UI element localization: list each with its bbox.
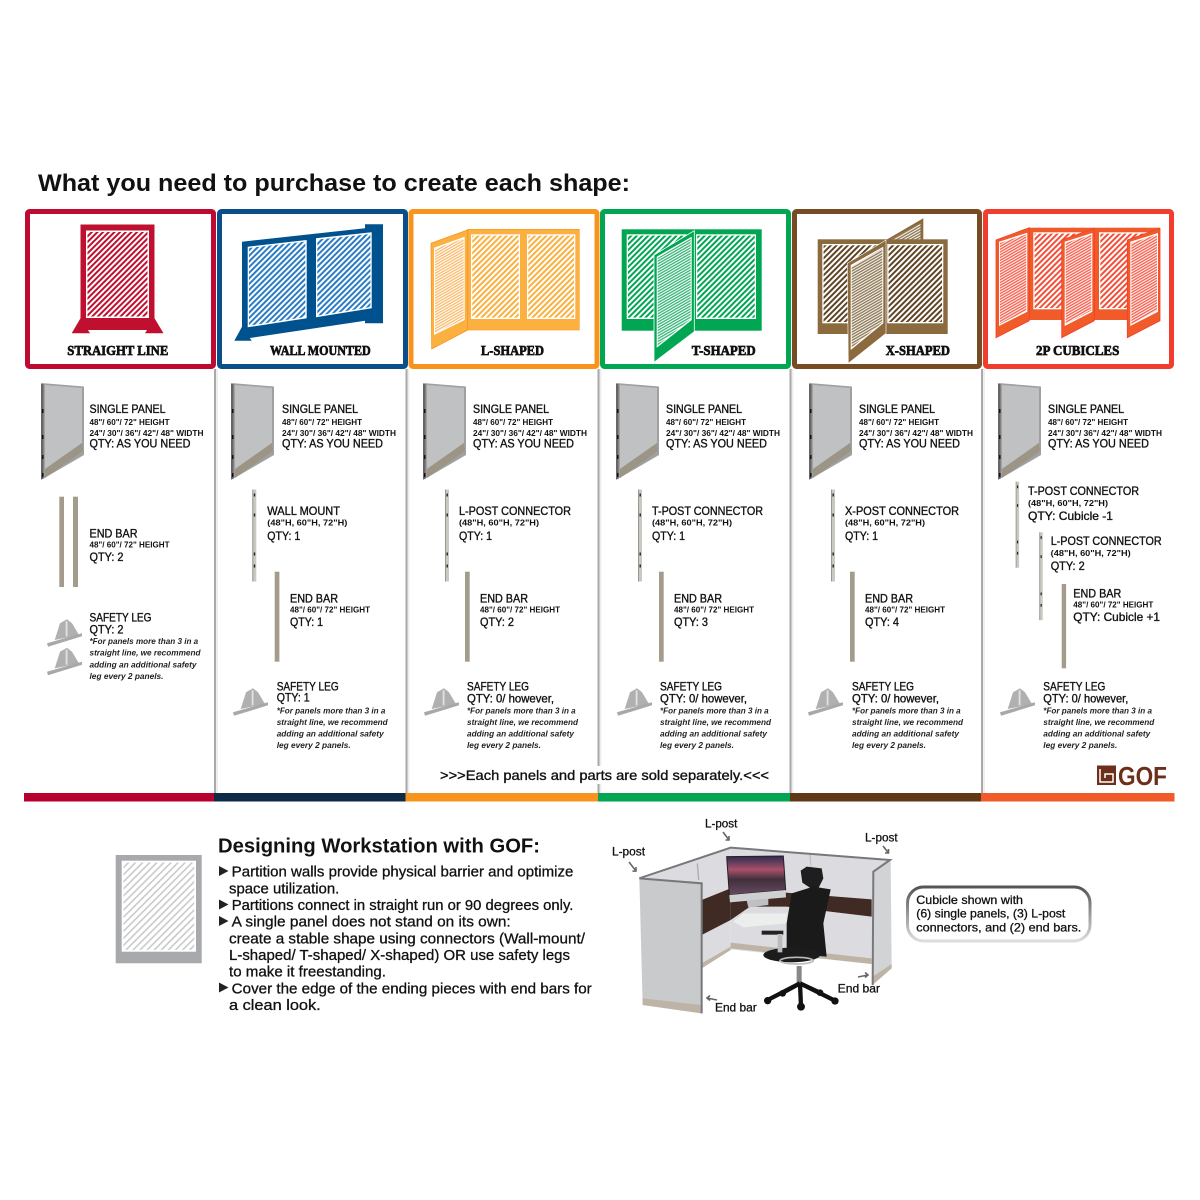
- text: single panel: QTY: AS YOU NEED: [859, 436, 960, 450]
- text: L-post connector: (48"H, 60"H, 72"H): [459, 519, 539, 528]
- icon: X-shaped partition: [818, 218, 948, 363]
- text: single panel: 24"/ 30"/ 36"/ 42"/ 48" WIDTH: [1048, 429, 1162, 438]
- title: What you need to purchase to create each shape:: [38, 170, 630, 197]
- text: single panel: 48"/ 60"/ 72" HEIGHT: [666, 418, 746, 427]
- text: single panel: QTY: AS YOU NEED: [473, 436, 574, 450]
- text: safety leg: SAFETY LEG: [90, 611, 152, 625]
- text: end bar: [290, 591, 370, 629]
- icon: safety leg: [1000, 688, 1035, 716]
- text: safety leg: adding an additional safety: [467, 729, 575, 739]
- labels: cubicle parts: End bar: [715, 1001, 757, 1015]
- callout: cubicle contents: [908, 887, 1090, 941]
- icon: single panel: [809, 383, 852, 480]
- icon: single panel: [616, 383, 659, 480]
- text: safety leg: [277, 680, 388, 750]
- text block: design guidance: L-shaped/ T-shaped/ X-shaped) OR use safety legs: [229, 947, 570, 964]
- text: safety leg: leg every 2 panels.: [467, 740, 541, 750]
- logo: GOF: [1097, 761, 1167, 791]
- text: T-post connector: [652, 504, 763, 543]
- text: safety leg: QTY: 0/ however,: [852, 691, 939, 705]
- text block: design guidance: a clean look.: [229, 997, 321, 1014]
- icon: safety leg: [424, 688, 459, 716]
- column 2 parts: [231, 383, 396, 750]
- text: end bar: 48"/ 60"/ 72" HEIGHT: [90, 540, 170, 549]
- text: end bar: [674, 591, 754, 629]
- text block: design guidance: [219, 864, 592, 1014]
- icon: T-post connector: [1016, 482, 1019, 568]
- text: single panel: [90, 402, 204, 450]
- text: end bar: END BAR: [865, 591, 913, 605]
- label: X-shaped: X-SHAPED: [886, 344, 950, 359]
- text block: design guidance: space utilization.: [229, 880, 339, 897]
- text: end bar: QTY: Cubicle +1: [1073, 610, 1160, 624]
- panel: L-shaped: [411, 212, 597, 366]
- column 3 parts: [423, 383, 587, 750]
- column dividers: [214, 369, 985, 793]
- heading: designing workstation: Designing Workstation with GOF:: [218, 835, 540, 857]
- logo: GOF: GOF: [1118, 761, 1167, 791]
- note: sold separately: >>>Each panels and parts are sold separately.<<<: [440, 767, 769, 783]
- text: single panel: 24"/ 30"/ 36"/ 42"/ 48" WIDTH: [473, 429, 587, 438]
- office chair: [762, 867, 839, 1011]
- monitor: [727, 856, 786, 907]
- text: safety leg: adding an additional safety: [90, 659, 198, 669]
- text: L-post connector: [1051, 534, 1162, 573]
- text: safety leg: adding an additional safety: [277, 729, 385, 739]
- icon: T-post connector: [638, 490, 642, 582]
- text: single panel: SINGLE PANEL: [666, 402, 742, 416]
- text block: design guidance: Partitions connect in straight run or 90 degrees only.: [232, 897, 573, 914]
- icon: single panel: [231, 383, 274, 480]
- text: safety leg: SAFETY LEG: [852, 680, 914, 694]
- text: safety leg: leg every 2 panels.: [660, 740, 734, 750]
- text: L-post connector: (48"H, 60"H, 72"H): [1051, 549, 1131, 558]
- icon: safety leg: [617, 688, 652, 716]
- text: safety leg: *For panels more than 3 in a: [90, 636, 198, 646]
- text: single panel: SINGLE PANEL: [1048, 402, 1124, 416]
- text: wall mount: (48"H, 60"H, 72"H): [267, 519, 348, 528]
- text: single panel: 24"/ 30"/ 36"/ 42"/ 48" WIDTH: [90, 429, 204, 438]
- text: safety leg: leg every 2 panels.: [1043, 740, 1117, 750]
- text: safety leg: SAFETY LEG: [660, 680, 722, 694]
- text: safety leg: straight line, we recommend: [467, 717, 579, 727]
- arrows: cubicle parts: [629, 832, 888, 1000]
- text: T-post connector: QTY: 1: [652, 529, 685, 543]
- text: safety leg: adding an additional safety: [852, 729, 960, 739]
- icon: L-post connector: [445, 490, 449, 582]
- text block: design guidance: to make it freestanding.: [229, 964, 386, 981]
- text: safety leg: QTY: 1: [277, 691, 310, 705]
- text: single panel: SINGLE PANEL: [90, 402, 166, 416]
- icon: end bar: [659, 572, 664, 662]
- text: L-post connector: L-POST CONNECTOR: [1051, 534, 1162, 548]
- text: end bar: QTY: 2: [480, 615, 514, 629]
- text: single panel: 48"/ 60"/ 72" HEIGHT: [859, 418, 939, 427]
- text: safety leg: *For panels more than 3 in a: [467, 705, 576, 715]
- icon: 2P cubicles partition: [996, 228, 1160, 338]
- text: single panel: [473, 402, 587, 450]
- text: end bar: [90, 527, 170, 564]
- text: end bar: [480, 591, 560, 629]
- text: safety leg: *For panels more than 3 in a: [1043, 705, 1152, 715]
- icon: end bars: [59, 497, 78, 587]
- text: end bar: END BAR: [674, 591, 722, 605]
- text: safety leg: straight line, we recommend: [90, 648, 201, 658]
- column 6 parts: [998, 383, 1162, 750]
- text: single panel: SINGLE PANEL: [473, 402, 549, 416]
- text: safety leg: straight line, we recommend: [1043, 717, 1155, 727]
- column 4 parts: [616, 383, 780, 750]
- text: single panel: QTY: AS YOU NEED: [90, 436, 191, 450]
- panel: 2P cubicles: [986, 212, 1172, 366]
- icon: L-post connector: [1039, 532, 1043, 620]
- icon: end bar: [275, 572, 279, 662]
- text: safety leg: straight line, we recommend: [660, 717, 772, 727]
- label: straight line: STRAIGHT LINE: [67, 344, 168, 359]
- text: end bar: QTY: 1: [290, 615, 323, 629]
- text: safety leg: [467, 680, 579, 750]
- text: T-post connector: (48"H, 60"H, 72"H): [652, 519, 732, 528]
- icon: end bar: [850, 572, 855, 662]
- illustration: cubicle with chair: [639, 848, 892, 1013]
- text: end bar: END BAR: [290, 591, 338, 605]
- callout: cubicle contents: (6) single panels, (3) L-post: [916, 906, 1066, 920]
- text: safety leg: [852, 680, 964, 750]
- text: end bar: END BAR: [1073, 587, 1122, 601]
- text: end bar: [865, 591, 945, 629]
- icon: X-post connector: [831, 490, 835, 582]
- text: X-post connector: [845, 504, 959, 543]
- text: single panel: 48"/ 60"/ 72" HEIGHT: [1048, 418, 1128, 427]
- text: X-post connector: (48"H, 60"H, 72"H): [845, 519, 925, 528]
- text: safety leg: leg every 2 panels.: [852, 740, 926, 750]
- column 1 parts: [41, 383, 204, 681]
- text: L-post connector: L-POST CONNECTOR: [459, 504, 571, 518]
- text: L-post connector: QTY: 1: [459, 529, 492, 543]
- text: safety leg: *For panels more than 3 in a: [277, 705, 386, 715]
- text: single panel: 24"/ 30"/ 36"/ 42"/ 48" WIDTH: [282, 429, 396, 438]
- labels: cubicle parts: L-post: [865, 831, 898, 845]
- text: single panel: SINGLE PANEL: [282, 402, 358, 416]
- text: X-post connector: QTY: 1: [845, 529, 878, 543]
- text: end bar: 48"/ 60"/ 72" HEIGHT: [480, 605, 560, 614]
- icon: single panel: [41, 383, 84, 480]
- labels: cubicle parts: L-post: [705, 816, 738, 830]
- text: T-post connector: [1028, 484, 1139, 523]
- text: wall mount: [267, 504, 348, 543]
- text: single panel: [666, 402, 780, 450]
- text: safety leg: [1043, 680, 1155, 750]
- text: safety leg: adding an additional safety: [1043, 729, 1152, 739]
- labels: cubicle parts: L-post: [612, 845, 646, 859]
- text block: design guidance: create a stable shape using connectors (Wall-mount/: [229, 930, 586, 947]
- text: end bar: 48"/ 60"/ 72" HEIGHT: [290, 605, 370, 614]
- text: single panel: 48"/ 60"/ 72" HEIGHT: [282, 418, 362, 427]
- text: safety leg: [660, 680, 772, 750]
- text: safety leg: straight line, we recommend: [277, 717, 388, 727]
- icon: safety leg: [808, 688, 843, 716]
- label: T-shaped: T-SHAPED: [692, 344, 756, 359]
- label: 2P cubicles: 2P CUBICLES: [1036, 344, 1119, 359]
- icon: wall mount post: [252, 490, 256, 582]
- column 5 parts: [808, 383, 973, 750]
- text: safety leg: QTY: 0/ however,: [1043, 691, 1128, 705]
- text: X-post connector: X-POST CONNECTOR: [845, 504, 959, 518]
- icon: grey partition sample: [116, 855, 202, 963]
- text: T-post connector: T-POST CONNECTOR: [652, 504, 763, 518]
- text: L-post connector: [459, 504, 571, 543]
- text: end bar: QTY: 3: [674, 615, 708, 629]
- callout: cubicle contents: connectors, and (2) end bars.: [916, 921, 1081, 935]
- text: single panel: 48"/ 60"/ 72" HEIGHT: [90, 418, 170, 427]
- text: end bar: END BAR: [90, 527, 138, 541]
- panel: straight line shape: [28, 212, 214, 366]
- text: T-post connector: T-POST CONNECTOR: [1028, 484, 1139, 498]
- text: safety leg: adding an additional safety: [660, 729, 768, 739]
- panel: wall mounted shape: [220, 212, 406, 366]
- icon: single panel: [423, 383, 466, 480]
- text: T-post connector: (48"H, 60"H, 72"H): [1028, 499, 1108, 508]
- icon: L-shaped partition: [431, 229, 579, 349]
- text: safety leg: SAFETY LEG: [467, 680, 529, 694]
- text: single panel: [859, 402, 973, 450]
- keyboard tray: [733, 913, 787, 927]
- text: safety leg: leg every 2 panels.: [90, 671, 164, 681]
- callout: cubicle contents: Cubicle shown with: [916, 893, 1023, 907]
- text: safety leg: [90, 611, 201, 681]
- labels: cubicle parts: [612, 816, 898, 1015]
- text: wall mount: WALL MOUNT: [267, 504, 341, 518]
- text: single panel: 24"/ 30"/ 36"/ 42"/ 48" WIDTH: [666, 429, 780, 438]
- text: single panel: 24"/ 30"/ 36"/ 42"/ 48" WIDTH: [859, 429, 973, 438]
- labels: cubicle parts: End bar: [838, 982, 880, 996]
- icon: single panel: [998, 383, 1041, 480]
- icon: end bar: [465, 572, 470, 662]
- text: end bar: 48"/ 60"/ 72" HEIGHT: [1073, 600, 1153, 609]
- text: safety leg: *For panels more than 3 in a: [852, 705, 961, 715]
- label: wall mounted: WALL MOUNTED: [270, 344, 371, 359]
- text: end bar: END BAR: [480, 591, 528, 605]
- text: end bar: 48"/ 60"/ 72" HEIGHT: [865, 605, 945, 614]
- text: T-post connector: QTY: Cubicle -1: [1028, 509, 1113, 523]
- text block: design guidance: A single panel does not stand on its own:: [232, 914, 511, 931]
- text: single panel: QTY: AS YOU NEED: [666, 436, 767, 450]
- text: safety leg: straight line, we recommend: [852, 717, 964, 727]
- text: safety leg: leg every 2 panels.: [277, 740, 351, 750]
- text block: design guidance: Cover the edge of the ending pieces with end bars for: [232, 980, 592, 997]
- text: safety leg: SAFETY LEG: [277, 680, 339, 694]
- text: end bar: QTY: 4: [865, 615, 899, 629]
- text: single panel: [282, 402, 396, 450]
- icon: straight line partition: [72, 224, 164, 333]
- icon: safety leg: [233, 688, 268, 716]
- text: end bar: 48"/ 60"/ 72" HEIGHT: [674, 605, 754, 614]
- text: end bar: QTY: 2: [90, 550, 124, 564]
- text: single panel: 48"/ 60"/ 72" HEIGHT: [473, 418, 553, 427]
- text: single panel: QTY: AS YOU NEED: [1048, 436, 1149, 450]
- icon: end bar: [1062, 584, 1066, 668]
- text: safety leg: QTY: 0/ however,: [467, 691, 554, 705]
- icon: T-shaped partition: [622, 229, 762, 362]
- text: wall mount: QTY: 1: [267, 529, 301, 543]
- text block: design guidance: Partition walls provide physical barrier and optimize: [232, 864, 573, 881]
- panel: T-shaped: [602, 212, 788, 366]
- panel: X-shaped: [794, 212, 980, 366]
- text: safety leg: *For panels more than 3 in a: [660, 705, 769, 715]
- colour footer bar: [24, 793, 1174, 802]
- icon: wall mounted partition: [234, 224, 383, 341]
- text: single panel: [1048, 402, 1162, 450]
- text: end bar: [1073, 587, 1160, 624]
- text: single panel: SINGLE PANEL: [859, 402, 935, 416]
- text: safety leg: SAFETY LEG: [1043, 680, 1105, 694]
- text: L-post connector: QTY: 2: [1051, 559, 1085, 573]
- text: safety leg: QTY: 0/ however,: [660, 691, 747, 705]
- text: safety leg: QTY: 2: [90, 622, 124, 636]
- icon: safety legs: [47, 619, 82, 675]
- text: single panel: QTY: AS YOU NEED: [282, 436, 383, 450]
- label: L-shaped: L-SHAPED: [481, 344, 544, 359]
